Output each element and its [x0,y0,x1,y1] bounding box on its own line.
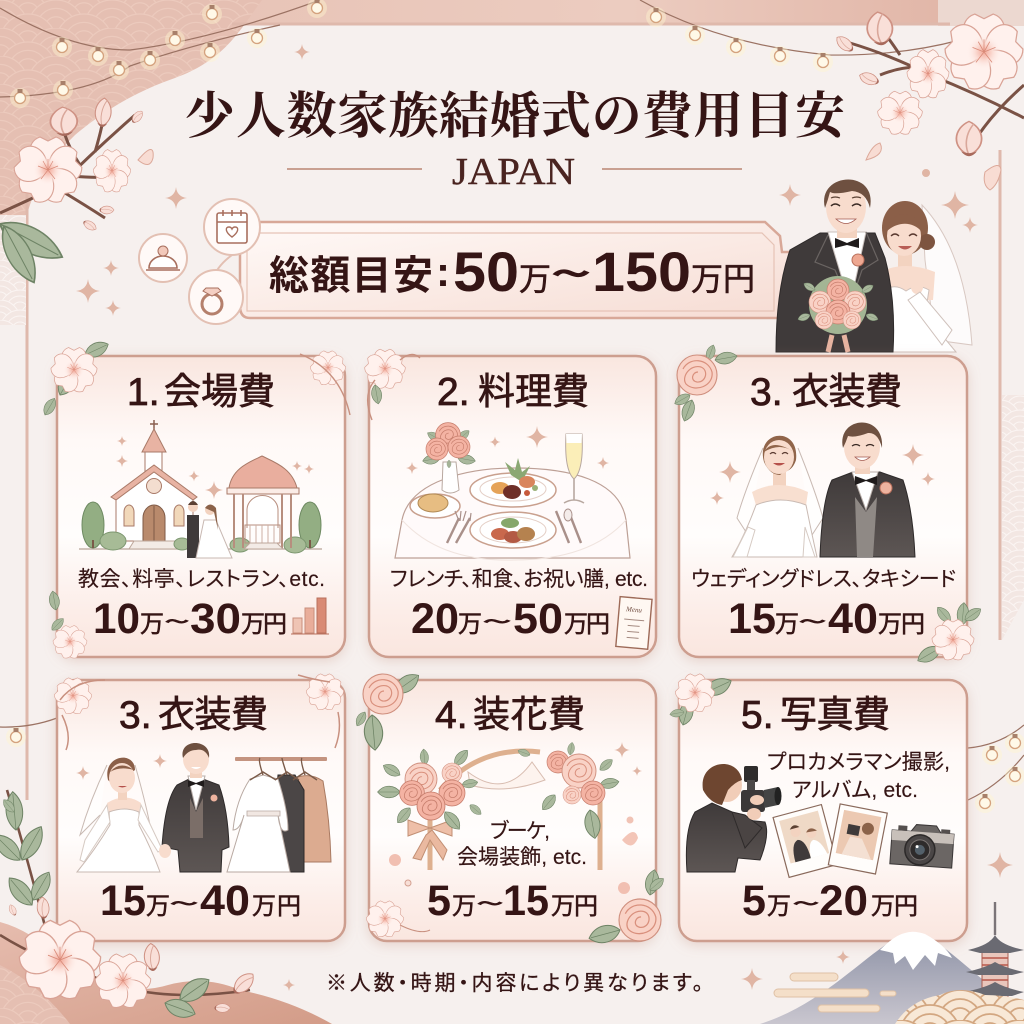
vase bouquet [442,462,459,493]
petals and sparkles [389,742,642,894]
top pink band [230,0,1024,24]
cherry blossoms top-left [0,97,145,288]
top-right patterned corner [938,0,1024,26]
price: 万 [140,604,164,639]
cutlery [447,518,470,543]
price: ~ [798,602,827,637]
icon: cloche [139,234,187,282]
total amount text: ~ [551,242,591,300]
icon: bar chart [291,598,329,634]
price: 万 [767,886,791,921]
illustration: bride and groom [732,422,915,557]
corner blossom [915,602,984,667]
icon: menu [616,597,652,649]
food [418,494,448,512]
champagne [566,434,582,479]
price [427,877,598,925]
price: ~ [169,884,199,919]
price: 10 [93,595,140,643]
sparkles [116,436,314,499]
price: 万円 [871,886,918,921]
heading: 3. [750,371,783,414]
heading: 5. [741,694,774,737]
icon: ring [189,270,243,324]
illustration: couple top right [776,179,972,352]
description: 会場装飾, etc. [457,846,587,869]
Mount Fuji [760,932,1024,1024]
string lights top-left [0,0,327,108]
description [457,820,587,869]
price: 万円 [564,604,610,639]
sparkles [710,444,935,505]
price [93,595,287,643]
price: 万 [452,886,476,921]
pagoda [964,902,1024,1020]
price [728,595,925,643]
price [411,595,610,643]
price: 万 [458,604,482,639]
price: 万 [146,886,170,921]
illustration: photographer [686,764,782,872]
total amount text: 150 [592,240,691,303]
heading: 装花費 [473,694,585,735]
total amount text: 総額目安 [269,243,433,301]
price: 50 [513,595,563,643]
corner rose [672,344,738,423]
heading: 3. [119,694,152,737]
heading: 衣装費 [792,371,902,412]
price: 万円 [241,604,287,639]
price: 5 [427,877,451,925]
corner blossoms [53,674,345,750]
panel: flower cost [353,669,666,946]
total amount text: : [436,248,450,295]
inner frame line [27,24,1000,800]
price: ~ [792,884,820,919]
price: ~ [482,602,512,637]
illustration: couple and wardrobe [77,743,331,872]
total amount text: 万 [519,254,551,300]
price: ~ [476,884,504,919]
heading: 料理費 [478,371,589,412]
stylized clouds [774,973,896,1012]
falling petals [138,143,1001,190]
total budget banner [240,222,794,318]
description: フレンチ、和食、お祝い膳, etc. [390,568,648,591]
price: 万円 [252,886,301,921]
description: プロカメラマン撮影, [767,751,950,774]
string lights top-right [640,0,960,72]
price: 5 [742,877,766,925]
heading [750,371,902,414]
footnote: ※人数・時期・内容により異なります。 [326,972,703,995]
price: 30 [190,595,241,643]
bride [870,201,972,352]
heading [437,371,589,414]
corner flower [363,349,420,420]
price [100,877,301,925]
price: 20 [411,595,459,643]
left pale pattern [0,215,26,325]
corner blossom and rose [365,869,666,946]
illustration: camera [890,823,955,868]
illustration: flower arch [378,742,620,870]
top-left seigaiha wave shape [0,0,262,215]
cherry blossoms top-right [833,10,1024,156]
description: ウェディングドレス、タキシード [691,568,956,591]
subtitle JAPAN: JAPAN [452,151,575,193]
price: 15 [503,877,549,925]
sparkles around header [76,44,978,316]
corner flowers [41,338,350,661]
illustration: church, gazebo, couple [79,420,322,558]
icon: calendar [204,199,260,255]
illustration: photographs [773,804,887,877]
panel: venue cost [41,338,350,661]
price: 40 [200,877,250,925]
heading: 2. [437,371,470,414]
heading: 写真費 [780,694,890,735]
description [767,751,950,802]
price: 万 [775,604,799,639]
plates [470,473,556,507]
groom [776,179,894,352]
total amount text: 万円 [691,254,755,300]
price [742,877,918,925]
price: 15 [100,877,146,925]
cherry branch bottom-left [0,790,258,1022]
panel: food cost [363,349,656,657]
panel: attire cost (top) [672,344,984,667]
title: 少人数家族結婚式の費用目安 [185,76,845,148]
price: 15 [728,595,776,643]
sparkles [406,426,609,474]
sparkles bottom [283,852,1013,991]
price: 万円 [878,604,925,639]
description: ブーケ, [490,820,550,843]
string lights lower right [968,725,1024,813]
price: 20 [819,877,868,925]
total amount text [269,240,755,303]
heading: 4. [435,694,468,737]
description: アルバム, etc. [792,779,918,802]
bouquet [797,276,879,352]
right pale pattern [1002,395,1024,640]
string lights lower left [0,718,57,747]
sparkles [76,754,167,780]
corner rose [353,669,423,751]
heading: 会場費 [164,371,275,412]
price: ~ [164,602,190,637]
heading: 衣装費 [158,694,268,735]
icon circles [139,199,260,324]
illustration: dining table [395,423,630,560]
price: 万円 [551,886,598,921]
icon: menu: Menu [625,605,643,615]
description: 教会、料亭、レストラン、etc. [78,568,325,591]
gold waves [895,990,1024,1024]
price: 40 [828,595,878,643]
bottom-left wave shape [0,922,332,1024]
panel: photo cost [669,674,967,941]
panel: attire cost (bottom) [53,674,345,941]
corner blossom [669,674,734,727]
bottom-left seigaiha pattern [0,965,70,1024]
total amount text: 50 [453,240,519,303]
heading: 1. [127,371,160,414]
